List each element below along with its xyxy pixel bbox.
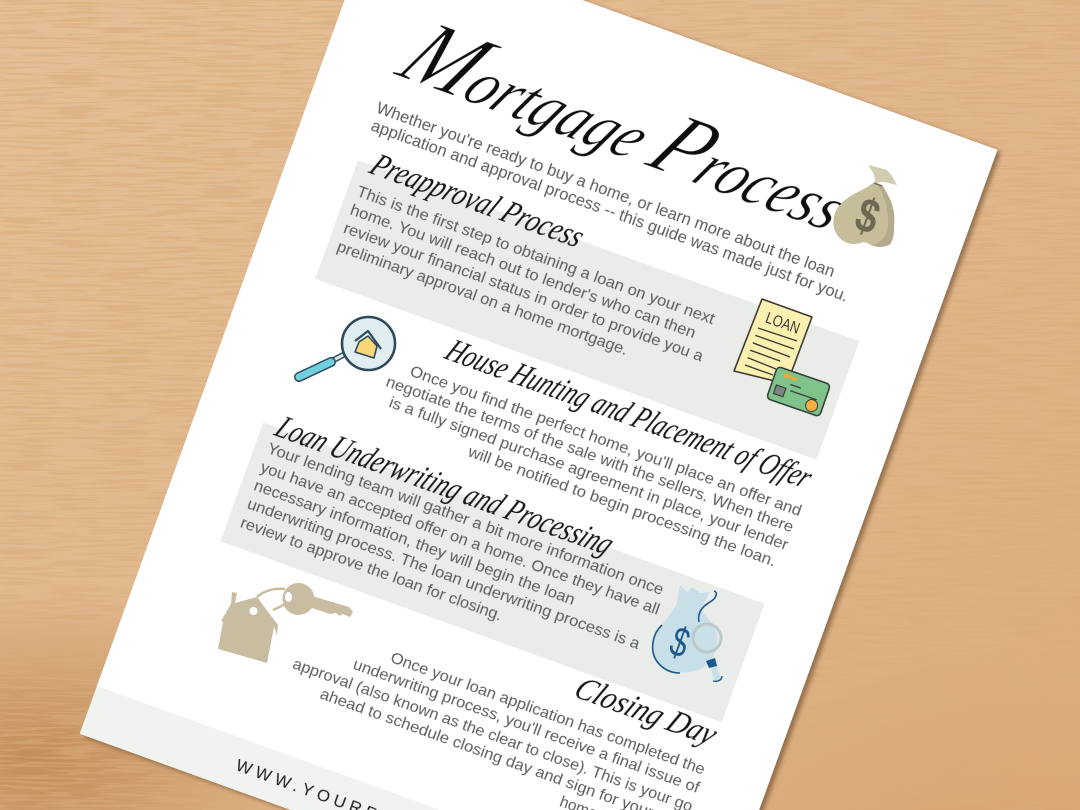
text block: underwriting (238, 440, 669, 674)
document title: LOAN (763, 310, 802, 338)
text block: closing day: approval (also known as the clear to close). This is your go (290, 656, 695, 810)
title: Mortgage Process (377, 3, 882, 248)
text block: underwriting: you have an accepted offer on a home. Once they have all (258, 459, 662, 619)
text block: closing day: Once your loan application has completed the (388, 650, 707, 779)
text block: preapproval: home. You will reach out to lender's who can then (348, 202, 698, 342)
panel: underwriting band (220, 423, 765, 722)
document (734, 299, 812, 384)
text block: house hunting: negotiate the terms of the sale with the sellers. When there (384, 374, 796, 536)
text block: underwriting: Your lending team will gather a bit more information once (265, 440, 666, 599)
text block: house hunting (371, 357, 804, 573)
icon: money bag: $ (848, 188, 886, 245)
heading: loan underwriting: Loan Underwriting and Processing (268, 409, 621, 562)
icon: house key (218, 583, 353, 663)
text block: house hunting: Once you find the perfect home, you'll place an offer and (408, 363, 804, 520)
text block: house hunting: will be notified to begin processing the loan. (465, 443, 778, 570)
text block: underwriting: necessary information, they will begin the loan (251, 477, 577, 609)
text block: preapproval: review your financial status in order to provide you a (341, 220, 705, 365)
heading: closing day: Closing Day (568, 671, 725, 752)
icon: money bag (833, 165, 897, 247)
panel: preapproval band (315, 160, 859, 460)
heading: house hunting: House Hunting and Placement of Offer (438, 333, 820, 495)
credit card (766, 366, 831, 417)
intro text: Whether you're ready to buy a home, or learn more about the loan (374, 98, 837, 281)
text block: preapproval (335, 183, 719, 384)
panel: footer band (80, 686, 722, 810)
icon: loan document and credit card (734, 299, 831, 417)
heading: preapproval process: Preapproval Process (362, 147, 592, 254)
text block: underwriting: underwriting process. The loan underwriting process is a (245, 496, 642, 653)
icon: money bag with magnifier (653, 585, 722, 683)
text block: house hunting: is a fully signed purchase agreement in place, your lender (387, 394, 791, 554)
text block: preapproval: This is the first step to obtaining a loan on your next (354, 183, 717, 328)
text block: underwriting: review to approve the loan for closing. (238, 515, 504, 625)
icon: money bag with magnifier: $ (664, 617, 696, 667)
text block: closing day: underwriting process, you'll receive a final issue of (351, 656, 702, 797)
intro text: application and approval process -- this guide was made just for you. (369, 116, 851, 306)
text block: preapproval: preliminary approval on a home mortgage. (335, 238, 630, 359)
icon: magnifying glass with house (299, 317, 395, 377)
